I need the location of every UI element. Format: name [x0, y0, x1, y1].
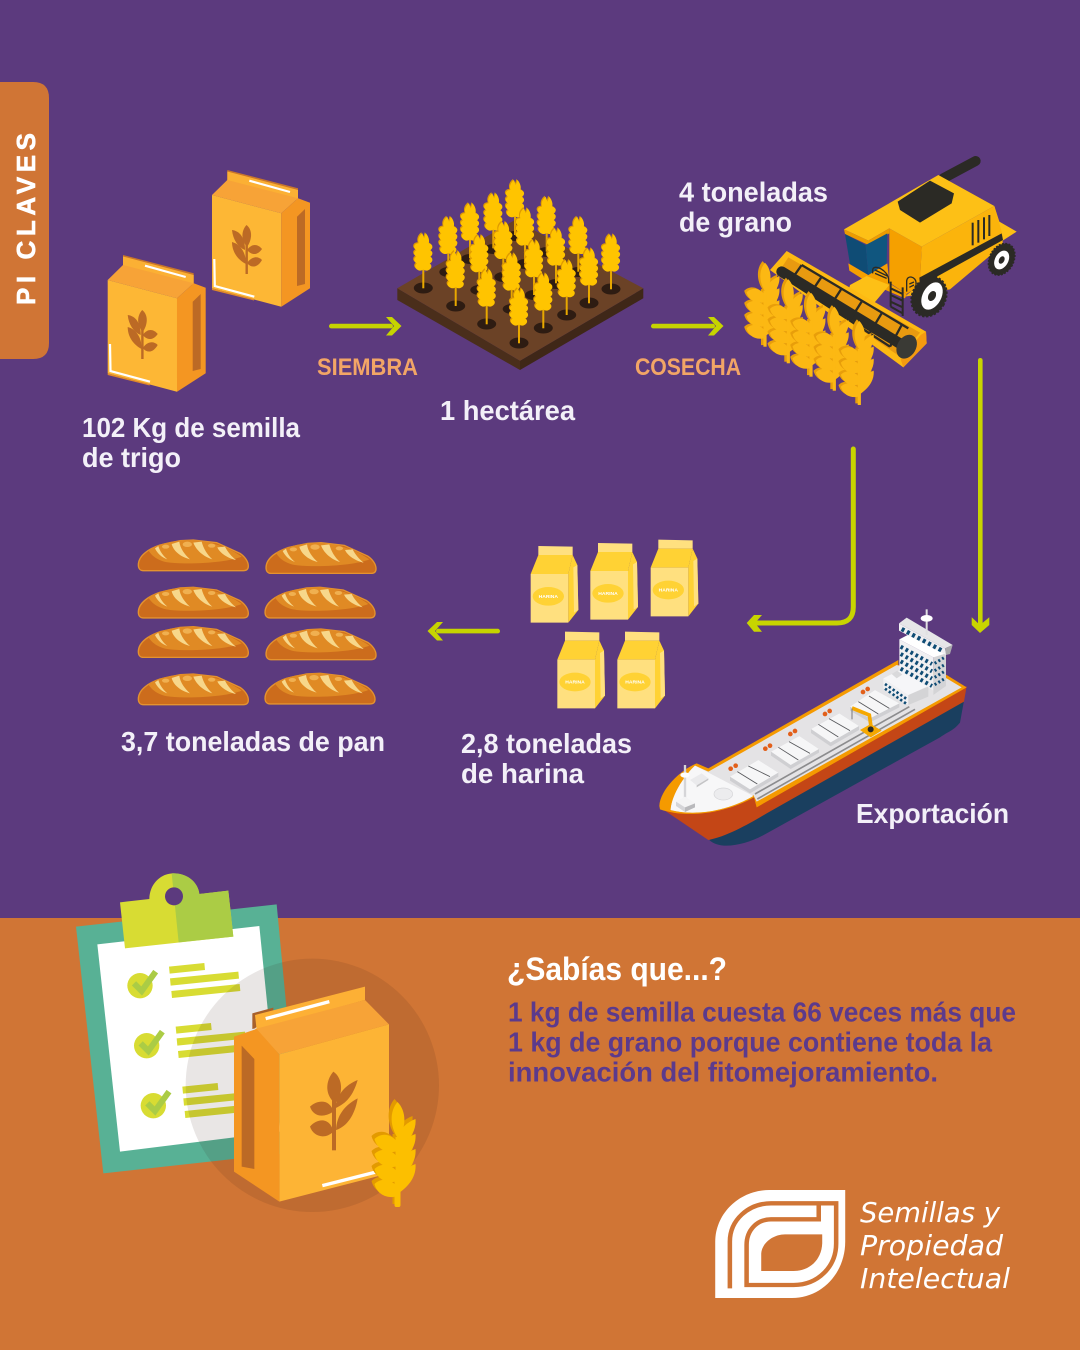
text: 1 hectárea: 1 hectárea: [440, 395, 575, 426]
logo wordmark: [860, 1196, 1010, 1295]
text block: explanation about seed cost: [508, 996, 1016, 1088]
arrow: seed to field: [329, 317, 402, 336]
illustration: one hectare wheat field: [397, 179, 643, 370]
side tab: PI CLAVES: [0, 82, 49, 359]
background: purple upper section: [0, 0, 1080, 919]
text: 4 toneladas de grano: [679, 176, 828, 238]
flour bag 3: [651, 540, 698, 616]
illustration: combine harvester: [744, 161, 1020, 405]
heading: ¿Sabías que...?: ¿Sabías que...?: [507, 951, 727, 987]
flour bag 5: [617, 632, 665, 708]
arrow: harvester down to ship: [972, 358, 989, 633]
text block: explanation about seed cost: 1 kg de grano porque contiene toda la: [508, 1026, 992, 1058]
shaded circle: [186, 959, 439, 1212]
text: 102 Kg de semilla de trigo: [82, 412, 300, 473]
text: 2,8 toneladas de harina: [461, 728, 632, 789]
text block: explanation about seed cost: 1 kg de semilla cuesta 66 veces más que: [508, 996, 1016, 1028]
icon: wheat ear: [372, 1099, 416, 1207]
illustration: clipboard with seed bag: [76, 873, 439, 1212]
flour bag 1: [531, 546, 578, 623]
side tab: PI CLAVES: PI CLAVES: [11, 133, 41, 305]
flour bag 4: HARINA: [565, 680, 585, 686]
text: 102 Kg de semilla de trigo: de trigo: [82, 442, 181, 473]
text: 2,8 toneladas de harina: 2,8 toneladas: [461, 728, 632, 759]
flour bag 2: [590, 543, 638, 620]
illustration: five bags of flour: [531, 540, 698, 708]
flour bag 1: HARINA: [539, 594, 558, 600]
logo wordmark: Semillas y: [860, 1196, 1000, 1229]
flour bag 5: HARINA: [625, 680, 645, 686]
logo: Semillas y Propiedad Intelectual: [715, 1190, 1010, 1298]
text: 4 toneladas de grano: de grano: [679, 206, 792, 238]
flour bag 3: HARINA: [659, 588, 678, 594]
text: Exportación: Exportación: [856, 798, 1009, 829]
illustration: eight loaves of bread: [138, 540, 376, 705]
logo wordmark: Intelectual: [860, 1262, 1010, 1295]
logo mark: [715, 1190, 845, 1298]
logo wordmark: Propiedad: [860, 1229, 1003, 1262]
flour bag 2: HARINA: [598, 591, 618, 597]
text: 2,8 toneladas de harina: de harina: [461, 758, 584, 789]
arrow: harvester to flour: [747, 449, 853, 632]
flour bag 4: [557, 632, 605, 708]
background: orange lower section: [0, 918, 1080, 1350]
large seed bag: [234, 987, 389, 1202]
text: 3,7 toneladas de pan: 3,7 toneladas de pan: [121, 726, 385, 757]
label: COSECHA: COSECHA: [635, 354, 741, 381]
illustration: cargo ship: [659, 609, 967, 846]
text: 4 toneladas de grano: 4 toneladas: [679, 176, 828, 208]
icon: two bags of wheat seed: [108, 170, 310, 392]
text: 102 Kg de semilla de trigo: 102 Kg de semilla: [82, 412, 300, 443]
label: SIEMBRA: SIEMBRA: [317, 354, 418, 381]
arrow: field to harvester: [651, 317, 724, 336]
text block: explanation about seed cost: innovación del fitomejoramiento.: [508, 1056, 938, 1088]
arrow: flour to bread: [428, 622, 500, 640]
clipboard: [76, 873, 300, 1173]
